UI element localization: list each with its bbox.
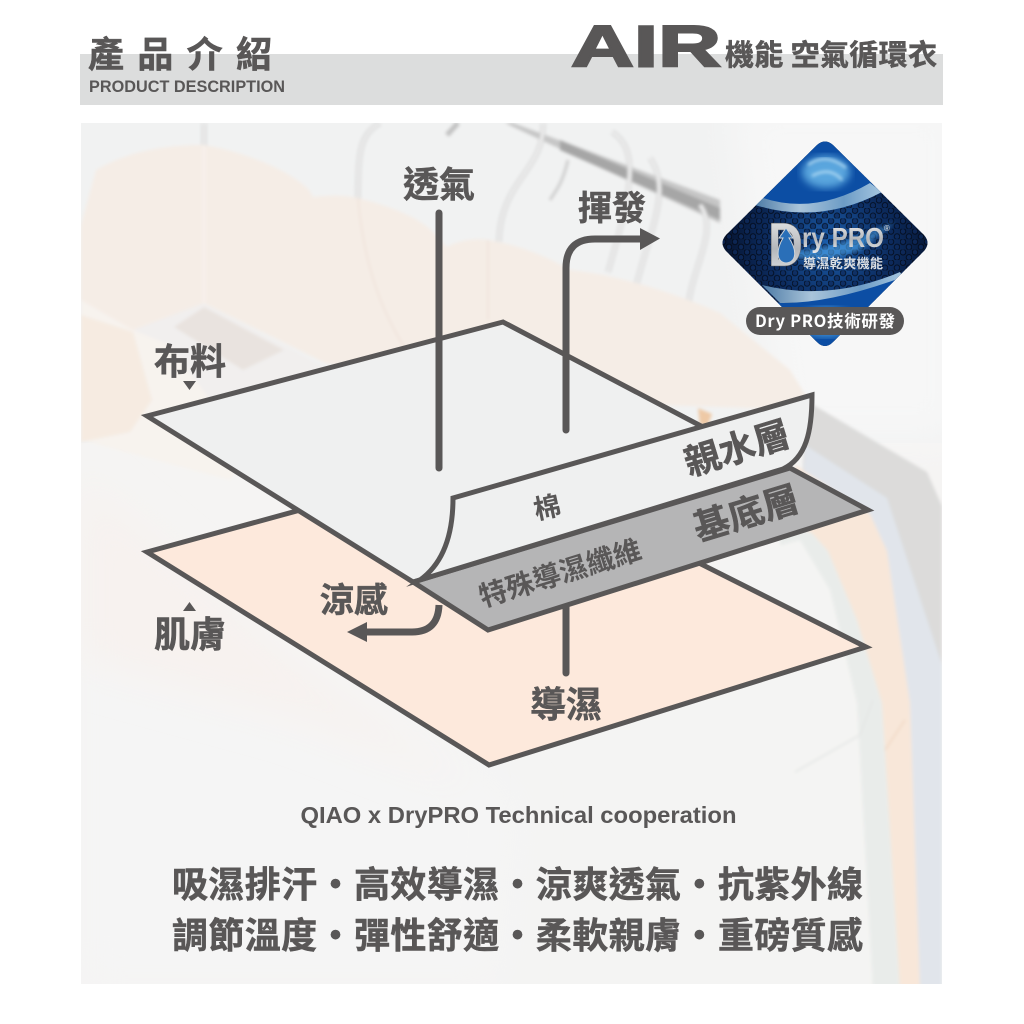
caption: technical cooperation: QIAO x DryPRO Technical cooperation — [300, 802, 736, 828]
label: 布料: 布料 — [154, 333, 226, 385]
label: 揮發: 揮發 — [578, 181, 646, 230]
label: 透氣: 透氣 — [403, 156, 475, 208]
badge: Dry PRO logo: ry PRO — [802, 222, 884, 253]
label: 棉: 棉 — [529, 484, 564, 527]
label: 特殊導濕纖維: 特殊導濕纖維 — [474, 528, 646, 616]
layer: skin — [147, 458, 866, 765]
badge: Dry PRO logo: 導濕乾爽機能 — [803, 253, 883, 272]
layer: base layer — [413, 468, 868, 630]
header bar — [80, 54, 943, 105]
layer: fabric top sheet — [147, 322, 720, 582]
title: AIR function — [571, 14, 937, 80]
badge: Dry PRO logo — [722, 142, 928, 346]
badge: Dry PRO logo: Dry PRO技術研發 — [755, 308, 896, 332]
arrow: cool feel — [347, 605, 439, 642]
label: 導濕: 導濕 — [530, 676, 602, 728]
title: product description: 產品介紹 — [88, 26, 272, 78]
feature list: 吸濕排汗・高效導濕・涼爽透氣・抗紫外線 — [172, 856, 863, 908]
feature list — [172, 856, 863, 959]
panel: clothing photo background — [81, 100, 960, 990]
title: product description: PRODUCT DESCRIPTION — [89, 77, 285, 96]
arrow: evaporate — [566, 228, 660, 430]
label: 肌膚: 肌膚 — [154, 606, 226, 658]
title: product description — [88, 26, 285, 96]
title: AIR function: AIR — [571, 14, 721, 80]
label: 涼感: 涼感 — [320, 573, 388, 622]
badge: Dry PRO logo: ® — [884, 224, 890, 233]
feature list: 調節溫度・彈性舒適・柔軟親膚・重磅質感 — [172, 907, 863, 959]
title: AIR function: 機能 空氣循環衣 — [725, 32, 937, 74]
badge: Dry PRO logo: D — [768, 211, 803, 280]
layer: hydrophilic curl — [420, 395, 812, 580]
label: 親水層: 親水層 — [677, 405, 796, 487]
arrow: breathable line — [436, 213, 442, 468]
label: 基底層: 基底層 — [686, 470, 805, 552]
arrow: wicking line — [562, 607, 570, 673]
